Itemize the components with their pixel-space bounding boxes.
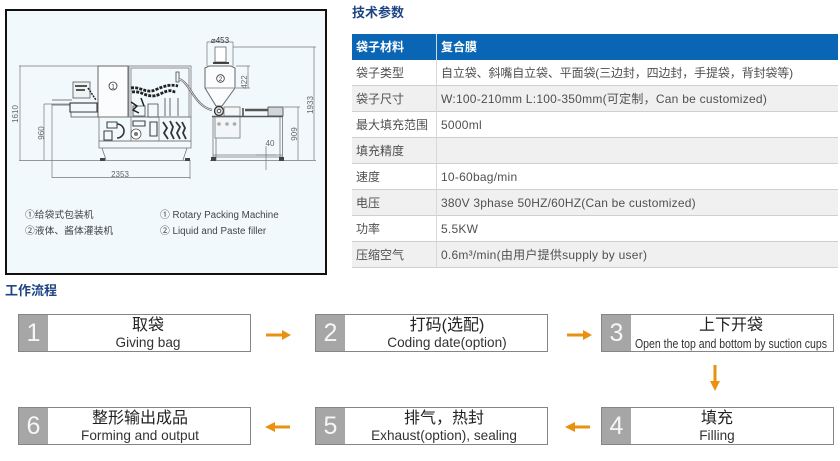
step 6: Forming and output (81, 428, 199, 443)
step 5: 排气，热封 (404, 410, 484, 427)
step 2: 2 (324, 319, 337, 347)
row: max filling range: 5000ml (441, 118, 482, 132)
legend: machine names: ②液体、酱体灌装机 (25, 226, 113, 237)
step 5: Exhaust(option), sealing (371, 428, 517, 443)
row: filling accuracy (352, 138, 838, 164)
dimension lines: 422 (240, 75, 249, 89)
step 1 (18, 314, 251, 352)
row: bag type: 自立袋、斜嘴自立袋、平面袋(三边封，四边封，手提袋，背封袋等) (441, 66, 793, 80)
rotary packing machine (98, 66, 191, 161)
arrow: step 3 to 4 (710, 365, 720, 391)
row: bag size: W:100-210mm L:100-350mm(可定制，Can be customized) (441, 92, 767, 106)
arrow: step 2 to 3 (567, 330, 592, 340)
step 5: 5 (324, 412, 337, 440)
heading: work process: 工作流程 (5, 283, 57, 298)
row: bag type (352, 60, 838, 86)
step 5 (315, 407, 548, 445)
row: speed (352, 164, 838, 190)
panel: machine layout drawing (5, 9, 327, 275)
liquid and paste filler (179, 47, 284, 161)
row: compressed air: 0.6m³/min(由用户提供supply by user) (441, 248, 647, 262)
row: filling accuracy: 填充精度 (356, 144, 404, 158)
dimension lines: 960 (37, 126, 46, 140)
dimension lines: 40 (266, 139, 275, 148)
legend: machine names: ② Liquid and Paste filler (160, 226, 266, 237)
step 3: 上下开袋 (699, 317, 763, 334)
step 4: 填充 (701, 410, 733, 427)
row: voltage (352, 190, 838, 216)
dimension lines (11, 36, 316, 179)
step 2: 打码(选配) (410, 317, 484, 334)
row: power (352, 216, 838, 242)
row: bag size (352, 86, 838, 112)
step 3: 3 (610, 319, 623, 347)
row: speed: 10-60bag/min (441, 170, 517, 184)
legend: machine names: ① Rotary Packing Machine (160, 210, 279, 221)
step 2: Coding date(option) (387, 335, 507, 350)
dimension lines: 909 (290, 127, 299, 141)
row: bag size: 袋子尺寸 (356, 92, 404, 106)
row: power: 5.5KW (441, 222, 478, 236)
step 6 (18, 407, 251, 445)
row: speed: 速度 (356, 170, 380, 184)
step 4: 4 (610, 412, 623, 440)
table: technical parameters (352, 34, 838, 268)
step 6: 整形输出成品 (92, 410, 188, 427)
liquid and paste filler: 2 (219, 77, 223, 83)
step 1: 取袋 (132, 317, 164, 334)
row: voltage: 380V 3phase 50HZ/60HZ(Can be customized) (441, 196, 696, 210)
arrow: step 4 to 5 (565, 422, 590, 432)
arrow: step 1 to 2 (266, 330, 291, 340)
rotary packing machine: 1 (111, 84, 115, 90)
legend: machine names: ①给袋式包装机 (25, 210, 94, 221)
step 3 (601, 314, 834, 352)
step 6: 6 (27, 412, 40, 440)
dimension lines: 1933 (306, 96, 315, 114)
row: max filling range: 最大填充范围 (356, 118, 428, 132)
row: power: 功率 (356, 222, 380, 236)
bag feeding unit (52, 82, 98, 117)
step 3: Open the top and bottom by suction cups (635, 336, 827, 351)
row: voltage: 电压 (356, 196, 380, 210)
row: bag material: 复合膜 (441, 40, 477, 54)
row: bag material (352, 34, 838, 60)
step 4 (601, 407, 834, 445)
arrow: step 5 to 6 (265, 422, 290, 432)
machine technical drawing (11, 36, 316, 179)
legend: machine names (25, 210, 279, 237)
step 2 (315, 314, 548, 352)
row: compressed air (352, 242, 838, 268)
heading: technical parameters: 技术参数 (352, 5, 404, 20)
row: bag material: 袋子材料 (356, 40, 404, 54)
dimension lines: ⌀453 (211, 36, 230, 45)
dimension lines: 1610 (11, 105, 20, 123)
row: compressed air: 压缩空气 (356, 248, 404, 262)
step 1: Giving bag (116, 335, 180, 350)
step 4: Filling (699, 428, 735, 443)
dimension lines: 2353 (111, 170, 129, 179)
row: bag type: 袋子类型 (356, 66, 404, 80)
step 1: 1 (27, 319, 40, 347)
row: max filling range (352, 112, 838, 138)
